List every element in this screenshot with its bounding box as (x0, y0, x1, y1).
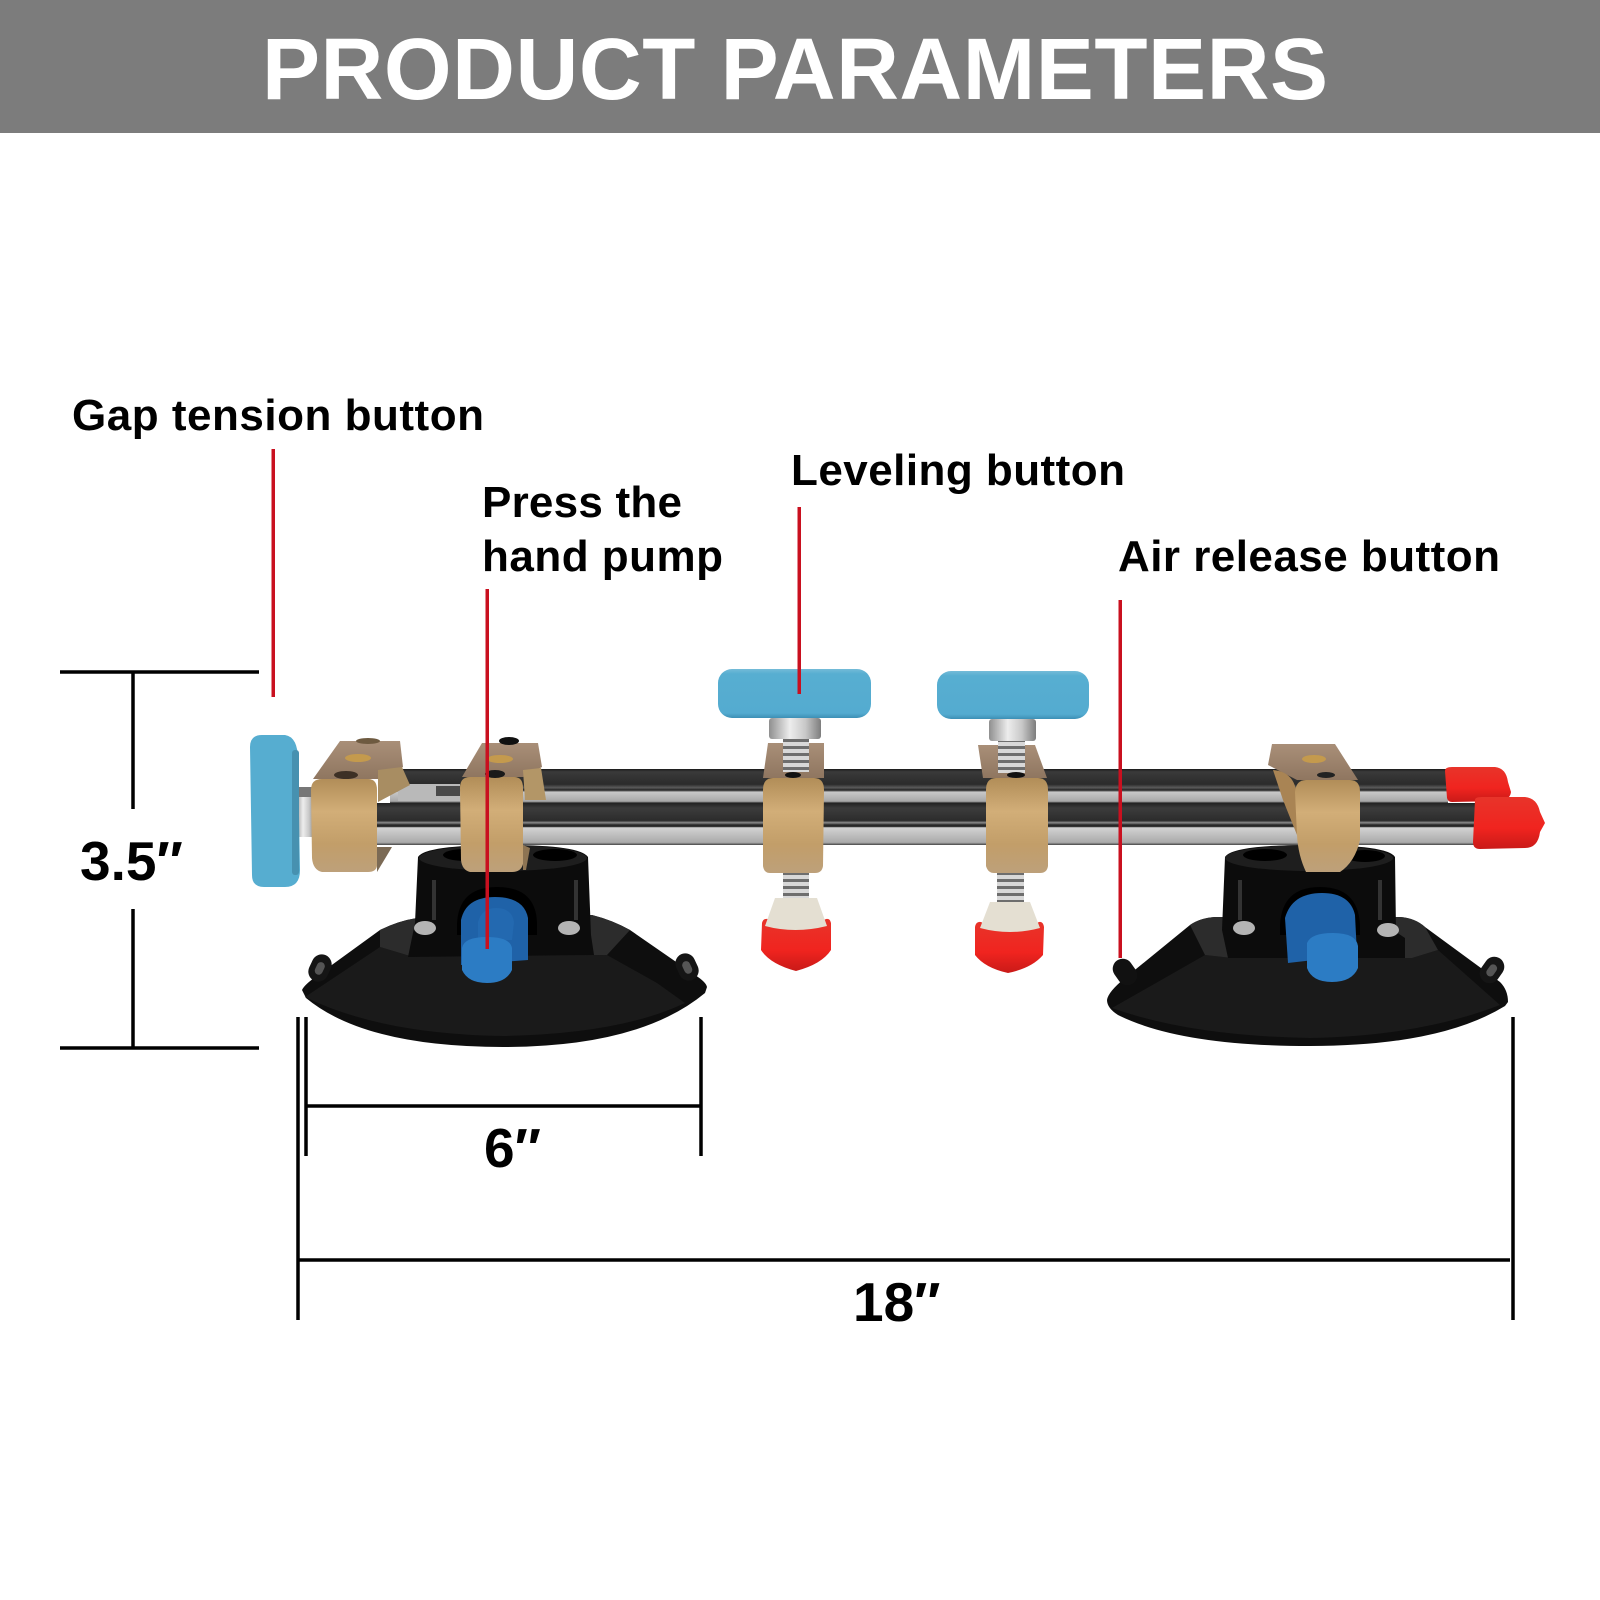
hand pump (461, 897, 528, 983)
chrome rods (375, 769, 1477, 845)
height dimension: 3.5 inches: 3.5″ (80, 830, 183, 892)
overall length dimension: 18 inches (298, 1017, 1513, 1333)
end clamp (311, 738, 410, 872)
left suction cup (302, 845, 707, 1047)
cup width dimension: 6 inches (306, 1017, 701, 1179)
red end caps (1445, 767, 1545, 849)
overall length dimension: 18 inches: 18″ (853, 1271, 941, 1333)
callout: air release button (1118, 532, 1500, 958)
callout: press the hand pump: hand pump (482, 532, 723, 581)
right clamp (1268, 744, 1360, 872)
right suction cup (1107, 845, 1508, 1046)
leveling screw assembly 1 (718, 669, 871, 971)
cup width dimension: 6 inches: 6″ (484, 1117, 541, 1179)
callout: air release button: Air release button (1118, 532, 1500, 581)
callout: press the hand pump: Press the (482, 478, 682, 527)
leveling screw assembly 2 (937, 671, 1089, 973)
callout: gap tension button: Gap tension button (72, 391, 484, 440)
height dimension: 3.5 inches (60, 672, 259, 1048)
callout: leveling button: Leveling button (791, 446, 1125, 495)
leveling knob (718, 669, 871, 718)
callout: leveling button (791, 446, 1125, 694)
leveling knob (937, 671, 1089, 719)
title: PRODUCT PARAMETERS (262, 21, 1328, 118)
gap tension knob (250, 735, 315, 887)
callout: gap tension button (72, 391, 484, 697)
press clamp (460, 737, 546, 872)
right pump (1285, 893, 1358, 982)
product photo: seam setter tool (250, 669, 1545, 1047)
header band (0, 0, 1600, 133)
callout: press the hand pump (482, 478, 723, 949)
